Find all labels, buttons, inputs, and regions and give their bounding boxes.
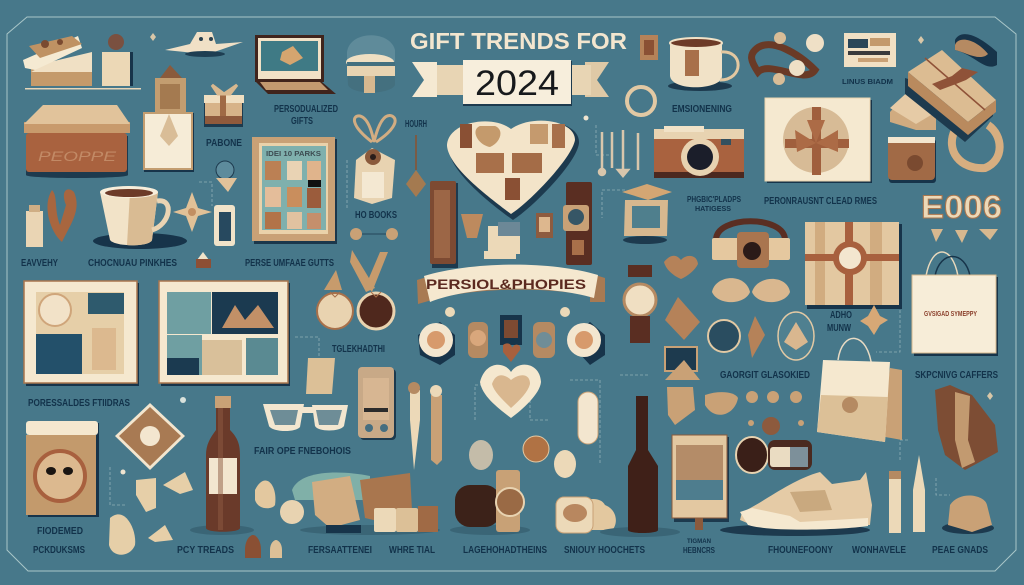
year ribbon: 2024 [475,64,559,103]
icon: dark plaque [430,181,458,268]
labels: bottom row: FERSAATTENEI [308,545,372,556]
icon: tall watch panel [563,182,592,265]
icon: bust [216,161,237,192]
label: linus biadm: LINUS BIADM [842,77,893,86]
icon: pods [736,437,812,473]
icons: jars lower [556,466,616,533]
label: hourh: HOURH [405,119,427,130]
icon: cake box [23,36,92,86]
label: adho munw: MUNW [827,323,851,334]
icon: textured gift [155,65,186,113]
label: personalized gifts: PERSODUALIZED [274,104,338,115]
icon: small pendants [469,392,598,478]
labels: bottom row: WONHAVELE [852,545,906,556]
icon: wrist watch bottom [450,470,530,535]
labels: bottom row: SNIOUY HOOCHETS [564,545,645,556]
year ribbon [412,60,609,106]
icon: small jar [214,205,235,246]
icon: pens [408,382,442,470]
label: poressaldes: PORESSALDES FTIIDRAS [28,398,130,409]
icon: clip bottle [26,205,43,247]
label: personal cleadrmes: PERONRAUSNT CLEAD RMES [764,196,877,207]
panel: photo book: IDEI 10 PARKS [266,149,321,158]
label: tigman: TIGMAN [687,538,711,545]
label: emsionening: EMSIONENING [672,104,732,115]
labels: bottom row [33,526,988,556]
icon: drone [165,32,243,57]
panel: tablet [672,435,729,530]
icon: glasses [263,404,348,431]
center: watches and beads [445,307,570,362]
icon: jar [346,35,395,93]
icon: stacked gift boxes [890,50,996,142]
banner: personal [417,265,605,304]
label: pabone: PABONE [206,138,242,149]
icons: rings trio [708,312,814,360]
icon: sneaker [720,472,872,536]
labels: bottom row: FHOUNEFOONY [768,545,833,556]
labels: row three: EAVVEHY [21,258,58,269]
icons: bottom ornaments [245,481,304,558]
icon: chocolate [942,496,994,534]
icon: scissors tag [354,116,395,204]
decorative number: E006 [921,189,1002,225]
banner: personal: PERSIOL&PHOPIES [426,276,586,292]
icon: brown loop [47,189,77,242]
label: ho books: HO BOOKS [355,210,397,221]
icon: cup [93,186,187,249]
shelf line [25,88,141,90]
icon: tools [599,130,638,176]
icon: card [844,33,896,67]
panel: gift wrap [805,222,902,309]
icon: cork diamond [115,403,185,470]
icon: wine bottle [190,396,254,535]
icon: knob bar [350,228,398,240]
label: small photo: PHGBIC'PLADPS [687,195,742,204]
triangles [931,229,998,243]
panel: heart board [447,121,579,220]
icon: laptop [255,35,336,94]
label: small photo [687,195,742,213]
labels: bottom row: LAGEHOHADTHEINS [463,545,547,556]
icon: ribbon rings [752,32,824,85]
labels: bottom row: PCY TREADS [177,545,234,556]
icon: tall bottle [600,396,680,537]
icons: lower lace and beads [667,387,804,435]
icon: phone [358,367,396,440]
icon: medallions [317,292,394,329]
labels: row three [21,258,334,269]
icon: small cup [461,214,483,238]
icon: pouch [306,358,335,394]
label: personalized gifts: GIFTS [291,116,313,127]
icon: star bow [860,305,888,335]
label: fair ope: FAIR OPE FNEBOHOIS [254,446,351,457]
label: personalized gifts [274,104,338,127]
label: tigman [683,538,716,555]
labels: bottom row: PCKDUKSMS [33,545,85,556]
icon: ring band [952,125,1000,168]
panel: framed chart [159,281,290,386]
icon: star bow [173,192,212,232]
icon: rabbit ears [324,250,388,292]
icon: leaf ornament [665,297,700,380]
icon: heart [664,256,698,279]
label: tigman: HEBNCRS [683,546,716,555]
label: adho munw [827,310,852,334]
panel: photo book [252,137,337,244]
icon: tag [640,35,658,60]
icon: ring [627,87,655,115]
icon: small gift [204,85,244,127]
icon: white box [144,113,194,172]
panel: cream shopping bag [817,338,902,442]
icons: lipsticks [889,455,925,533]
label: adho munw: ADHO [830,310,852,321]
label: gaorgit: GAORGIT GLASOKIED [720,370,810,381]
center: flower left [418,322,455,365]
labels: row three: CHOCNUAU PINKHES [88,258,177,269]
labels: bottom row: PEAE GNADS [932,545,988,556]
center: flower right [567,322,605,365]
icons: small rocks [109,472,193,555]
icon: rock [935,385,998,470]
panel: big box [24,105,130,178]
icons: shell pair [712,278,790,302]
panel: framed picture left [24,281,139,386]
icon: watch with flowers [624,265,656,343]
icon: dotted box [102,34,133,86]
icon: dark item [955,34,997,67]
heading: Gift Trends For: GIFT TRENDS FOR [410,28,627,54]
icon: small card [536,213,553,238]
icon: small device [484,222,520,259]
icon: cloth pile [292,473,440,535]
labels: bottom row: FIODEMED [37,526,83,537]
panel: cork box [26,421,99,517]
icon: camera [654,126,744,178]
icon: brown box [888,137,936,183]
center: heart [480,365,541,418]
icon: muffin [196,252,211,268]
labels: row three: PERSE UMFAAE GUTTS [245,258,334,269]
panel: white shopping bag: GVSIGAD SYMEPPY [924,311,977,318]
panel: big box: PEOPPE [38,148,117,164]
labels: bottom row: WHRE TIAL [389,545,435,556]
label: tglekhadthi: TGLEKHADTHI [332,344,385,355]
icon: pendant [406,135,426,197]
panel: white shopping bag [912,252,998,356]
label: small photo: HATIGESS [695,206,731,213]
panel: gift card [765,98,872,183]
icon: mug [668,38,738,91]
icon: gift jar [622,184,672,244]
icon: camera strap [712,221,790,268]
label: skpcnivg: SKPCNIVG CAFFERS [915,370,998,381]
